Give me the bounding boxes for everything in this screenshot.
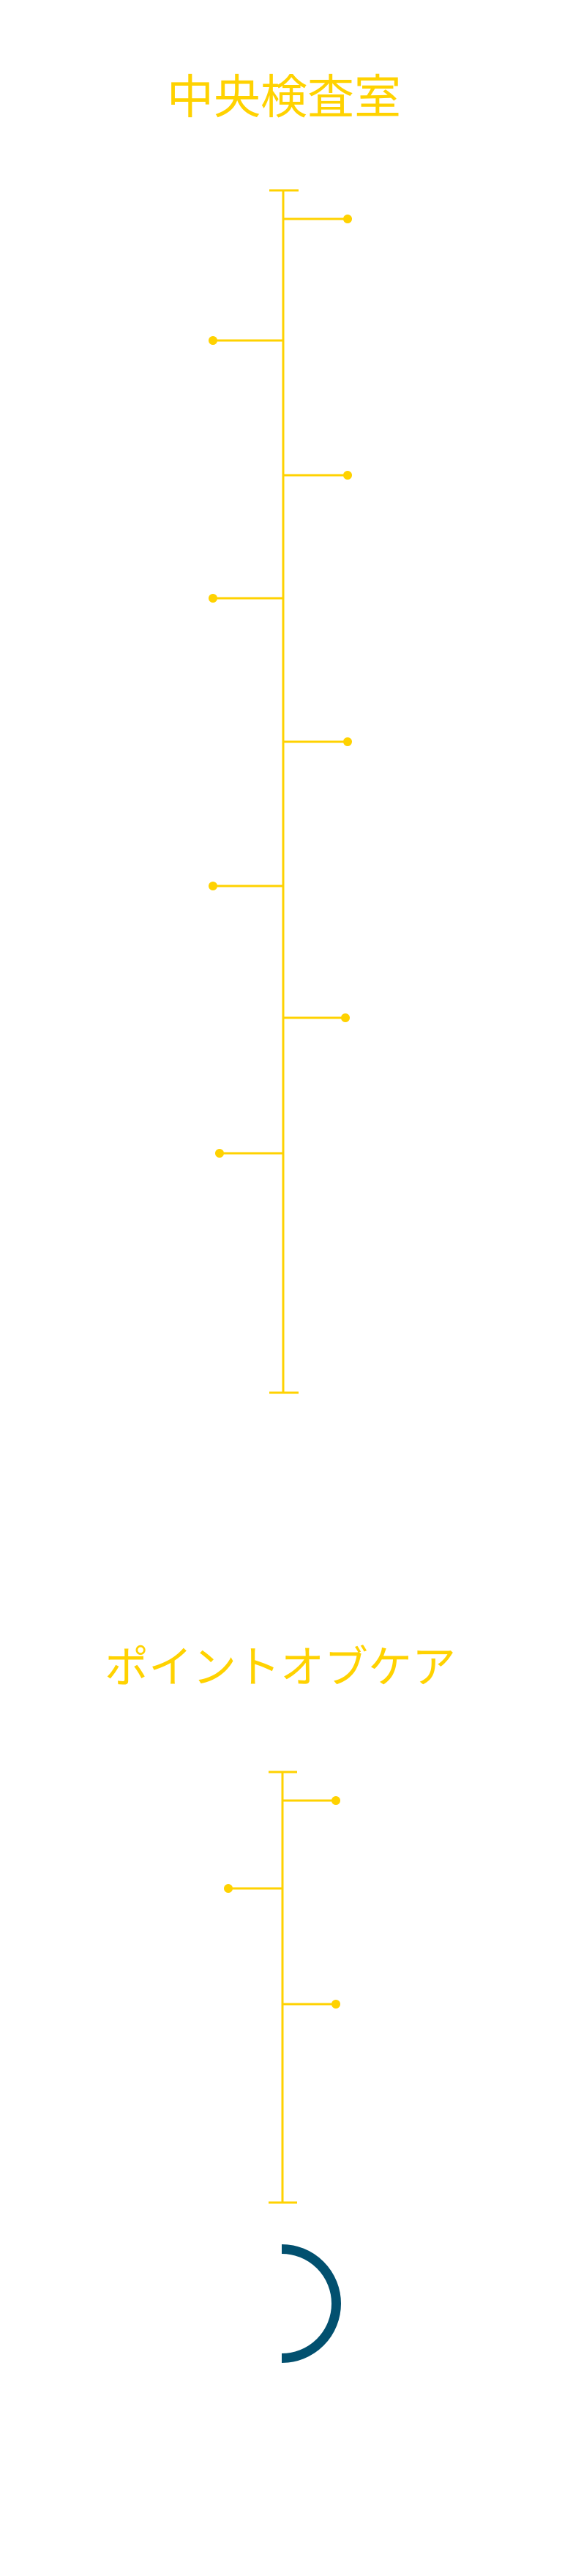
branch 6 left xyxy=(209,882,283,890)
branch 4 left xyxy=(209,594,283,603)
branch 3 right xyxy=(282,2000,340,2009)
branch 2 left xyxy=(224,1884,282,1893)
title: point of care: ポイントオブケア xyxy=(105,1643,456,1692)
branch 8 left xyxy=(215,1149,283,1158)
title: central laboratory: 中央検査室 xyxy=(167,71,401,124)
branch 7 right xyxy=(283,1013,350,1022)
timeline: point of care xyxy=(224,1772,340,2203)
timeline: central laboratory xyxy=(209,190,352,1393)
branch 1 right xyxy=(283,215,352,223)
branch 1 right xyxy=(282,1796,340,1805)
branch 2 left xyxy=(209,336,283,345)
branch 3 right xyxy=(283,471,352,480)
icon: half-circle arc xyxy=(282,2249,337,2358)
branch 5 right xyxy=(283,737,352,746)
